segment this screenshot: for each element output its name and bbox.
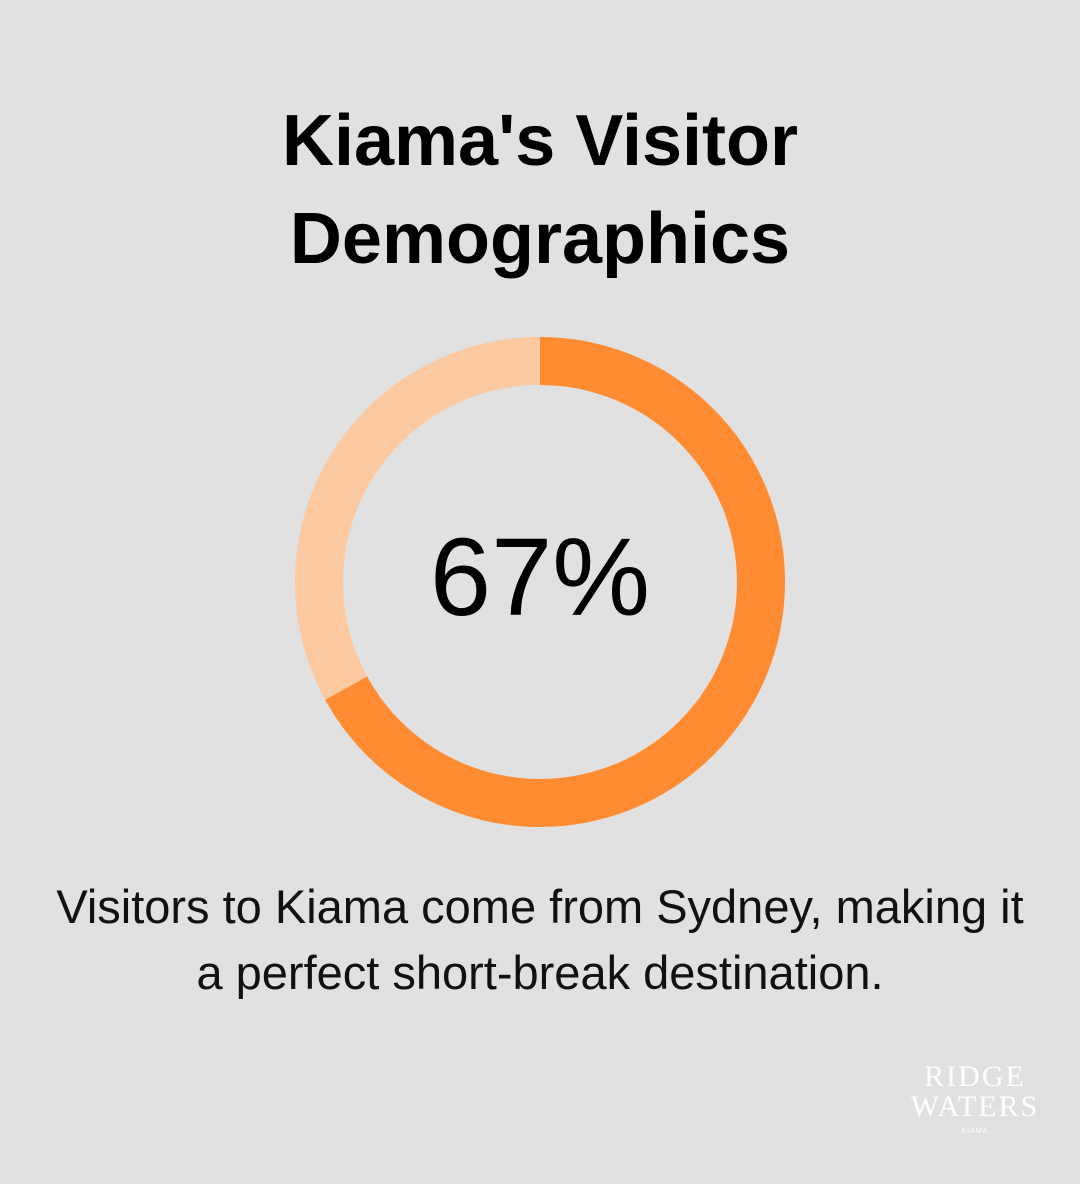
description: a perfect short-break destination. xyxy=(196,946,884,999)
logo: RIDGE xyxy=(924,1060,1026,1093)
logo: KIAMA xyxy=(962,1128,988,1135)
donut chart: 67% xyxy=(430,516,650,639)
description xyxy=(56,880,1024,999)
title: Demographics xyxy=(290,199,790,279)
description: Visitors to Kiama come from Sydney, making it xyxy=(56,880,1024,933)
title: Kiama's Visitor xyxy=(282,101,798,181)
title xyxy=(282,101,798,279)
logo: WATERS xyxy=(911,1090,1039,1123)
logo xyxy=(910,1060,1039,1135)
